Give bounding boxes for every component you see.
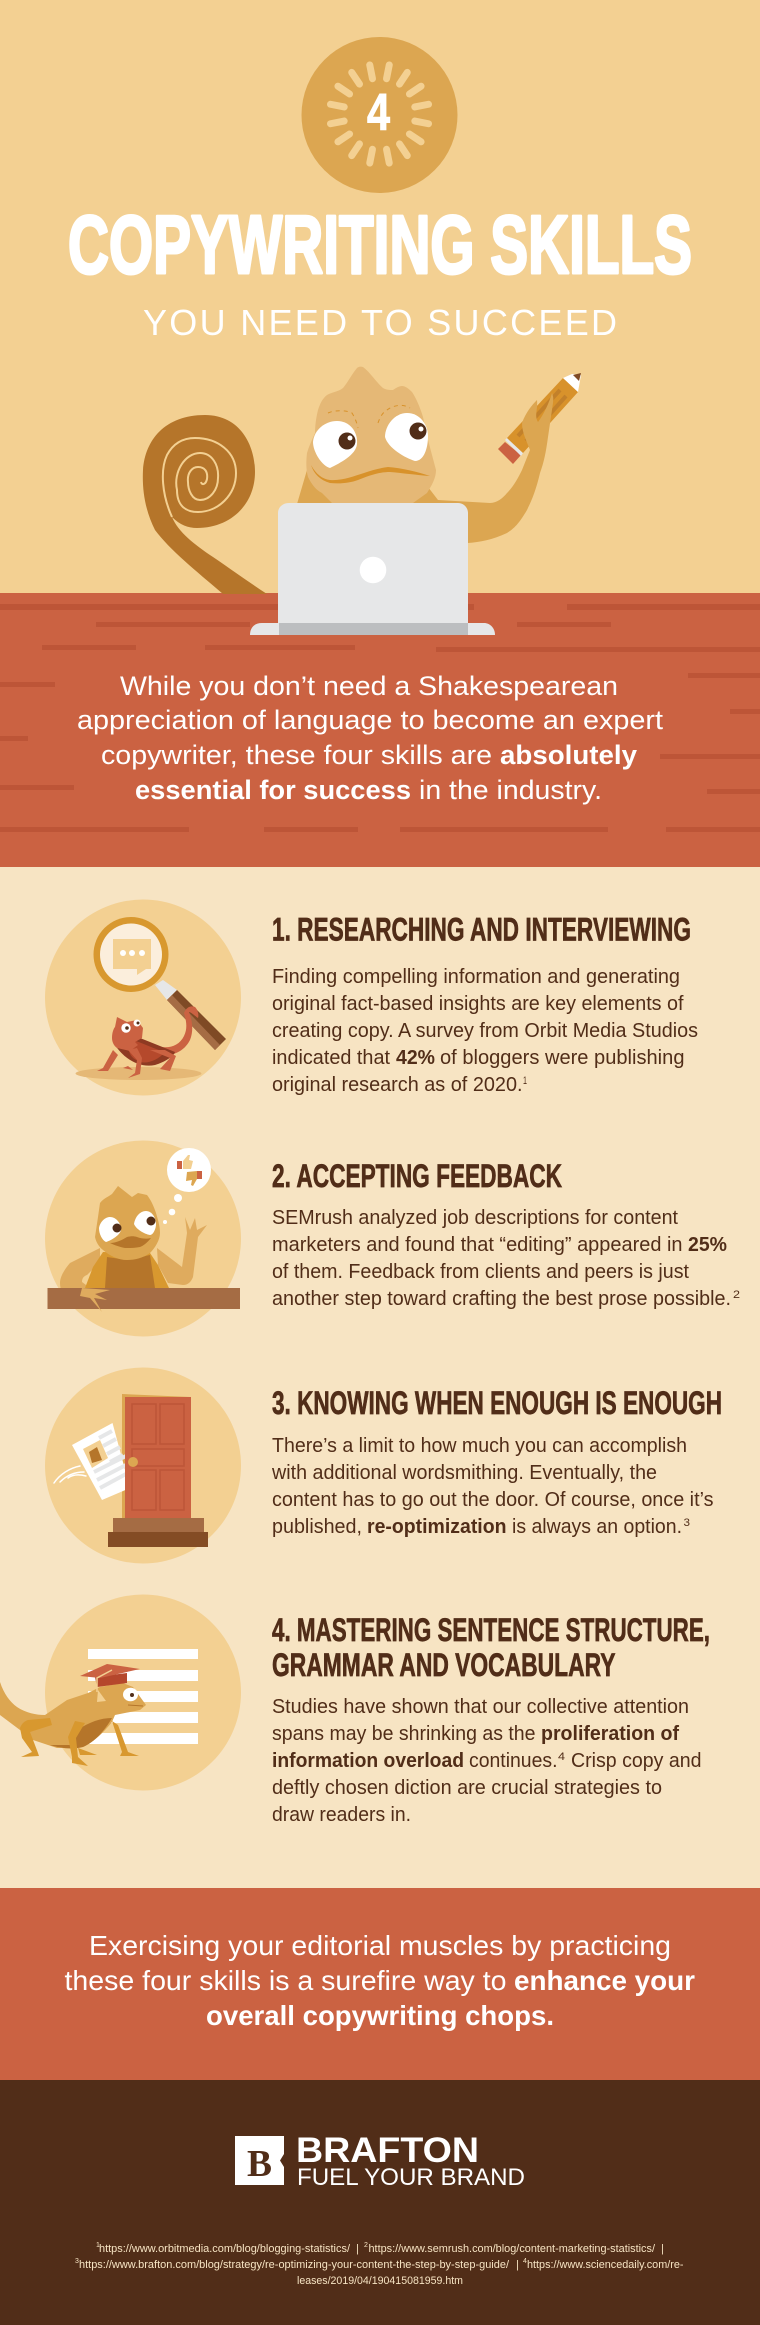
panel: skill 4	[0, 1594, 710, 1826]
panel: conclusion: enhance your	[514, 1965, 695, 1996]
panel: skill 3	[45, 1368, 722, 1564]
icon: number badge	[302, 37, 458, 193]
logo	[235, 2131, 525, 2191]
body text: of them. Feedback from clients and peers is just	[272, 1261, 689, 1283]
intro text	[77, 671, 664, 805]
body text: with additional wordsmithing. Eventually, the	[271, 1462, 657, 1484]
body text	[272, 1696, 702, 1826]
references: https://www.brafton.com/blog/strategy/re-optimizing-your-content-the-step-by-step-guide/	[79, 2259, 510, 2271]
panel: conclusion: Exercising your editorial muscles by practicing	[89, 1930, 671, 1961]
body text: 42%	[396, 1047, 435, 1069]
heading: 2. ACCEPTING FEEDBACK	[272, 1158, 562, 1194]
brow freckles	[328, 405, 410, 428]
logo: B	[247, 2143, 272, 2185]
body text: Studies have shown that our collective attention	[272, 1696, 689, 1718]
body text: re-optimization	[367, 1516, 506, 1538]
intro text: essential for success	[135, 775, 411, 805]
body text: creating copy. A survey from Orbit Media Studios	[272, 1020, 698, 1042]
heading: GRAMMAR AND VOCABULARY	[272, 1647, 616, 1683]
tail	[143, 415, 267, 594]
body text: draw readers in.	[272, 1804, 411, 1826]
intro text: in the industry.	[419, 775, 602, 805]
body text: SEMrush analyzed job descriptions for content	[272, 1207, 678, 1229]
body text: 25%	[688, 1234, 727, 1256]
illustration: graduate chameleon and text lines	[0, 1594, 241, 1790]
body text	[272, 966, 698, 1096]
intro text: appreciation of language to become an expert	[77, 705, 664, 735]
references: 2	[364, 2242, 368, 2249]
body text: content has to go out the door. Of course, once it’s	[272, 1489, 714, 1511]
panel: conclusion: these four skills is a surefire way to	[64, 1965, 506, 1996]
logo: FUEL YOUR BRAND	[297, 2164, 525, 2191]
illustration: door and paper	[45, 1368, 241, 1564]
body and arm	[297, 393, 553, 544]
eye: left	[313, 421, 357, 468]
pencil	[498, 373, 581, 464]
illustration: chameleon with feedback thought	[45, 1140, 241, 1336]
references: |	[516, 2259, 519, 2271]
body text: original research as of 2020.	[272, 1074, 522, 1096]
subtitle: YOU NEED TO SUCCEED	[143, 302, 617, 343]
body text: 4	[558, 1751, 565, 1763]
icon: number badge: 4	[367, 84, 390, 142]
body text: 3	[684, 1517, 690, 1529]
head	[306, 367, 436, 503]
panel: table background	[0, 593, 760, 868]
body text: marketers and found that “editing” appeared in	[272, 1234, 682, 1256]
references: leases/2019/04/190415081959.htm	[297, 2275, 463, 2287]
body text: 1	[523, 1075, 527, 1087]
body text: another step toward crafting the best prose possible.	[272, 1288, 731, 1310]
intro text: copywriter, these four skills are	[101, 740, 492, 770]
illustration: chameleon at laptop	[143, 367, 581, 635]
eye: right	[385, 413, 428, 461]
references: 3	[75, 2258, 79, 2265]
laptop	[250, 503, 495, 635]
body text: deftly chosen diction are crucial strategies to	[272, 1777, 662, 1799]
panel: skills background	[0, 867, 760, 1889]
body text: Crisp copy and	[571, 1750, 702, 1772]
illustration: magnifier and red chameleon	[45, 900, 241, 1096]
body text	[272, 1207, 740, 1310]
body text: spans may be shrinking as the	[272, 1723, 536, 1745]
body text: original fact-based insights are key elements of	[272, 993, 684, 1015]
references: 1	[96, 2242, 100, 2249]
body text: 2	[733, 1289, 740, 1301]
references: |	[661, 2243, 664, 2255]
panel: header background	[0, 0, 760, 594]
heading	[272, 1612, 710, 1683]
body text: proliferation of	[541, 1723, 679, 1745]
references	[75, 2242, 684, 2287]
body text: is always an option.	[512, 1516, 682, 1538]
body text: published,	[272, 1516, 362, 1538]
references: https://www.sciencedaily.com/re-	[527, 2259, 684, 2271]
body text: There’s a limit to how much you can accomplish	[272, 1435, 687, 1457]
references: https://www.semrush.com/blog/content-marketing-statistics/	[368, 2243, 656, 2255]
references: https://www.orbitmedia.com/blog/blogging-statistics/	[99, 2243, 351, 2255]
body text	[271, 1435, 714, 1538]
body text: Finding compelling information and generating	[272, 966, 680, 988]
logo: BRAFTON	[296, 2131, 479, 2170]
panel: skill 2	[45, 1140, 740, 1336]
panel: footer	[0, 2080, 760, 2325]
references: |	[356, 2243, 359, 2255]
mouth	[311, 465, 430, 483]
body text: information overload	[272, 1750, 464, 1772]
body text: of bloggers were publishing	[440, 1047, 684, 1069]
intro text: While you don’t need a Shakespearean	[120, 671, 618, 701]
body text: indicated that	[272, 1047, 390, 1069]
references: 4	[523, 2258, 527, 2265]
body text: continues.	[469, 1750, 558, 1772]
intro text: absolutely	[500, 740, 637, 770]
panel: skill 1	[45, 900, 698, 1096]
panel: conclusion: overall copywriting chops.	[206, 2000, 554, 2031]
panel: conclusion	[0, 1888, 760, 2081]
